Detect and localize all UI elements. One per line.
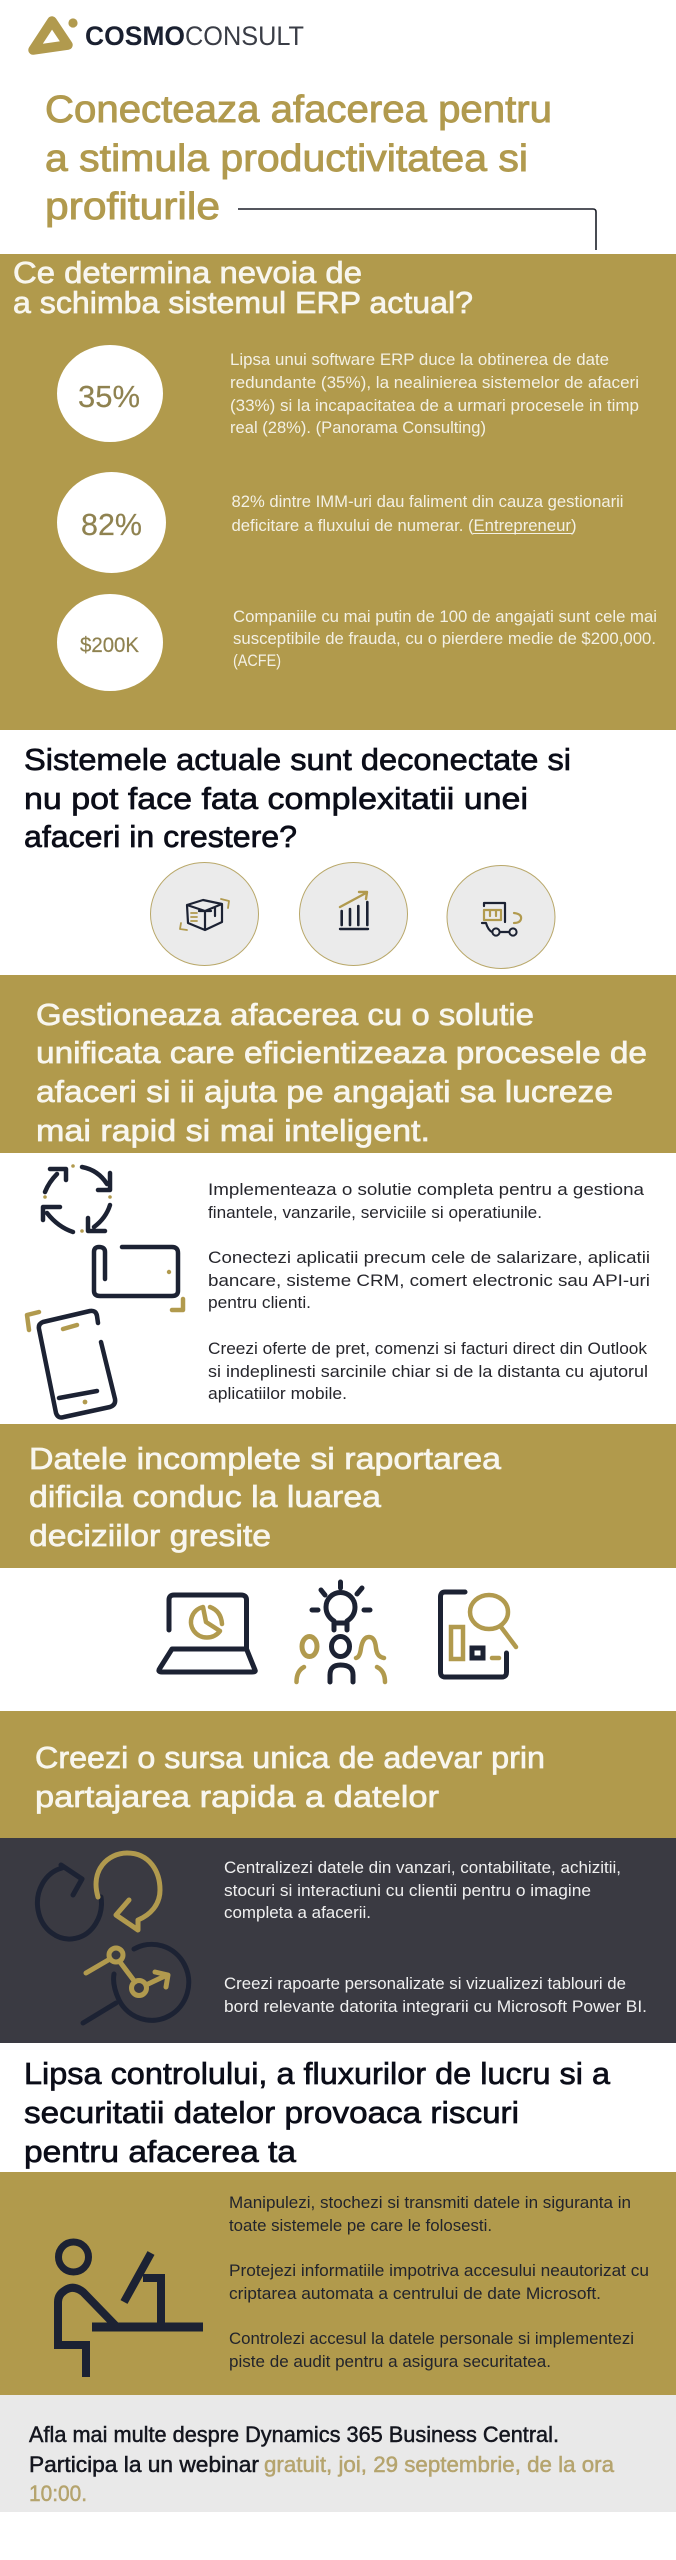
text block: 35% xyxy=(230,350,639,437)
heading: lack of control: securitatii datelor provoaca riscuri xyxy=(24,2095,519,2130)
text block: unified solution benefits: pentru clienti. xyxy=(208,1293,311,1312)
text block: 35%: Lipsa unui software ERP duce la obtinerea de date xyxy=(230,350,609,369)
icon: growth chart in circle xyxy=(300,862,408,966)
panel: data sharing details xyxy=(0,1838,676,2043)
text block: unified solution benefits xyxy=(208,1180,650,1403)
heading: lack of control: pentru afacerea ta xyxy=(24,2134,297,2169)
panel: unified solution headline: mai rapid si mai inteligent. xyxy=(36,1113,430,1148)
panel: what drives the need for ERP change xyxy=(0,254,676,730)
connector line from title xyxy=(238,209,596,250)
text block: security: piste de audit pentru a asigura securitatea. xyxy=(229,2352,551,2371)
panel: single source of truth headline: partajarea rapida a datelor xyxy=(35,1779,439,1814)
icon: sync arrows xyxy=(37,1853,160,1939)
panel: incomplete data headline: deciziilor gresite xyxy=(29,1518,271,1553)
stat: 35% xyxy=(57,345,163,442)
panel: unified solution headline: unificata care eficientizeaza procesele de xyxy=(36,1035,647,1070)
title: profiturile xyxy=(45,186,220,228)
logo: Cosmo Consult: CONSULT xyxy=(185,21,304,51)
panel: unified solution headline: Gestioneaza afacerea cu o solutie xyxy=(36,997,534,1032)
text block: unified solution benefits: Conectezi aplicatii precum cele de salarizare, aplicatii xyxy=(208,1248,650,1267)
text block: 82%: 82% dintre IMM-uri dau faliment din cauza gestionarii xyxy=(232,492,624,511)
panel: incomplete data headline: dificila conduc la luarea xyxy=(29,1479,382,1514)
icon: laptop with pie chart xyxy=(159,1595,255,1672)
icon: delivery cart in circle xyxy=(447,866,555,968)
text block: 82%: deficitare a fluxului de numerar. (Entrepreneur) xyxy=(232,516,576,535)
heading: Ce determina nevoia de xyxy=(13,255,362,290)
text block: security: Controlezi accesul la datele personale si implementezi xyxy=(229,2329,634,2348)
text block: data sharing: Creezi rapoarte personalizate si vizualizezi tablouri de xyxy=(224,1974,626,1993)
panel: unified solution headline: afaceri si ii ajuta pe angajati sa lucreze xyxy=(36,1074,613,1109)
text block: $200K xyxy=(233,607,657,670)
text block: security xyxy=(229,2193,649,2371)
panel: unified solution headline xyxy=(0,975,676,1153)
panel: single source of truth headline: Creezi o sursa unica de adevar prin xyxy=(35,1740,545,1775)
icon: tablet xyxy=(94,1247,183,1310)
text block: $200K: Companiile cu mai putin de 100 de angajati sunt cele mai xyxy=(233,607,657,626)
panel: call to action: Afla mai multe despre Dynamics 365 Business Central. xyxy=(29,2422,559,2447)
panel: incomplete data headline xyxy=(0,1424,676,1568)
heading: a schimba sistemul ERP actual? xyxy=(13,285,473,320)
panel: call to action xyxy=(0,2395,676,2512)
text block: $200K: (ACFE) xyxy=(233,651,281,670)
panel: call to action: 10:00. xyxy=(29,2481,87,2506)
text block: 35%: (33%) si la incapacitatea de a urmari procesele in timp xyxy=(230,396,639,415)
heading: disconnected systems: afaceri in crestere? xyxy=(24,819,297,854)
stat: 82% xyxy=(57,472,166,573)
text block: data sharing xyxy=(224,1858,647,2016)
panel: incomplete data headline: Datele incomplete si raportarea xyxy=(29,1441,502,1476)
text block: $200K: susceptibile de frauda, cu o pierdere medie de $200,000. xyxy=(233,629,656,648)
text block: security: Protejezi informatiile impotriva accesului neautorizat cu xyxy=(229,2261,649,2280)
icon: mobile phone xyxy=(27,1311,115,1418)
text block: data sharing: completa a afacerii. xyxy=(224,1903,371,1922)
heading: disconnected systems xyxy=(24,742,571,854)
panel: call to action: Participa la un webinar xyxy=(29,2452,259,2477)
text block: unified solution benefits: Creezi oferte de pret, comenzi si facturi direct din Outlook xyxy=(208,1339,648,1358)
logo: Cosmo Consult xyxy=(33,18,304,51)
text block: unified solution benefits: si indeplinesti sarcinile chiar si de la distanta cu ajutorul xyxy=(208,1362,648,1381)
title xyxy=(45,89,552,228)
text block: security: toate sistemele pe care le folosesti. xyxy=(229,2216,492,2235)
text block: security: Manipulezi, stochezi si transmiti datele in siguranta in xyxy=(229,2193,631,2212)
text block: data sharing: Centralizezi datele din vanzari, contabilitate, achizitii, xyxy=(224,1858,621,1877)
heading: disconnected systems: Sistemele actuale sunt deconectate si xyxy=(24,742,571,777)
text block: unified solution benefits: finantele, vanzarile, serviciile si operatiunile. xyxy=(208,1203,542,1222)
stat: 82%: 82% xyxy=(81,507,142,542)
text block: 35%: redundante (35%), la nealinierea sistemelor de afaceri xyxy=(230,373,639,392)
title: Conecteaza afacerea pentru xyxy=(45,89,552,131)
icon: box in circle xyxy=(150,862,258,966)
icon: idea and people xyxy=(296,1582,385,1682)
panel: single source of truth headline xyxy=(0,1711,676,1838)
text block: unified solution benefits: bancare, sisteme CRM, comert electronic sau API-uri xyxy=(208,1271,650,1290)
heading xyxy=(13,255,473,320)
stat: 35%: 35% xyxy=(78,379,140,414)
text block: security: criptarea automata a centrului de date Microsoft. xyxy=(229,2284,601,2303)
heading: lack of control xyxy=(24,2056,611,2169)
text block: 35%: real (28%). (Panorama Consulting) xyxy=(230,418,486,437)
logo: Cosmo Consult: COSMO xyxy=(85,21,185,51)
text block: unified solution benefits: aplicatiilor mobile. xyxy=(208,1384,347,1403)
text block: unified solution benefits: Implementeaza o solutie completa pentru a gestiona xyxy=(208,1180,645,1199)
icon: cycle arrows xyxy=(43,1164,112,1233)
text block: data sharing: stocuri si interactiuni cu clientii pentru o imagine xyxy=(224,1881,591,1900)
icon: person at desk xyxy=(58,2242,203,2377)
heading: disconnected systems: nu pot face fata complexitatii unei xyxy=(24,781,528,816)
heading: lack of control: Lipsa controlului, a fluxurilor de lucru si a xyxy=(24,2056,611,2091)
stat: $200K xyxy=(57,594,163,691)
stat: $200K: $200K xyxy=(80,634,139,657)
icon: document with magnifier xyxy=(440,1592,516,1677)
text block: 82% xyxy=(232,492,624,535)
panel: call to action: gratuit, joi, 29 septembrie, de la ora xyxy=(264,2452,615,2477)
title: a stimula productivitatea si xyxy=(45,138,528,180)
panel: security details xyxy=(0,2172,676,2395)
text block: data sharing: bord relevante datorita integrarii cu Microsoft Power BI. xyxy=(224,1997,647,2016)
icon: analytics magnifier xyxy=(83,1944,189,2023)
